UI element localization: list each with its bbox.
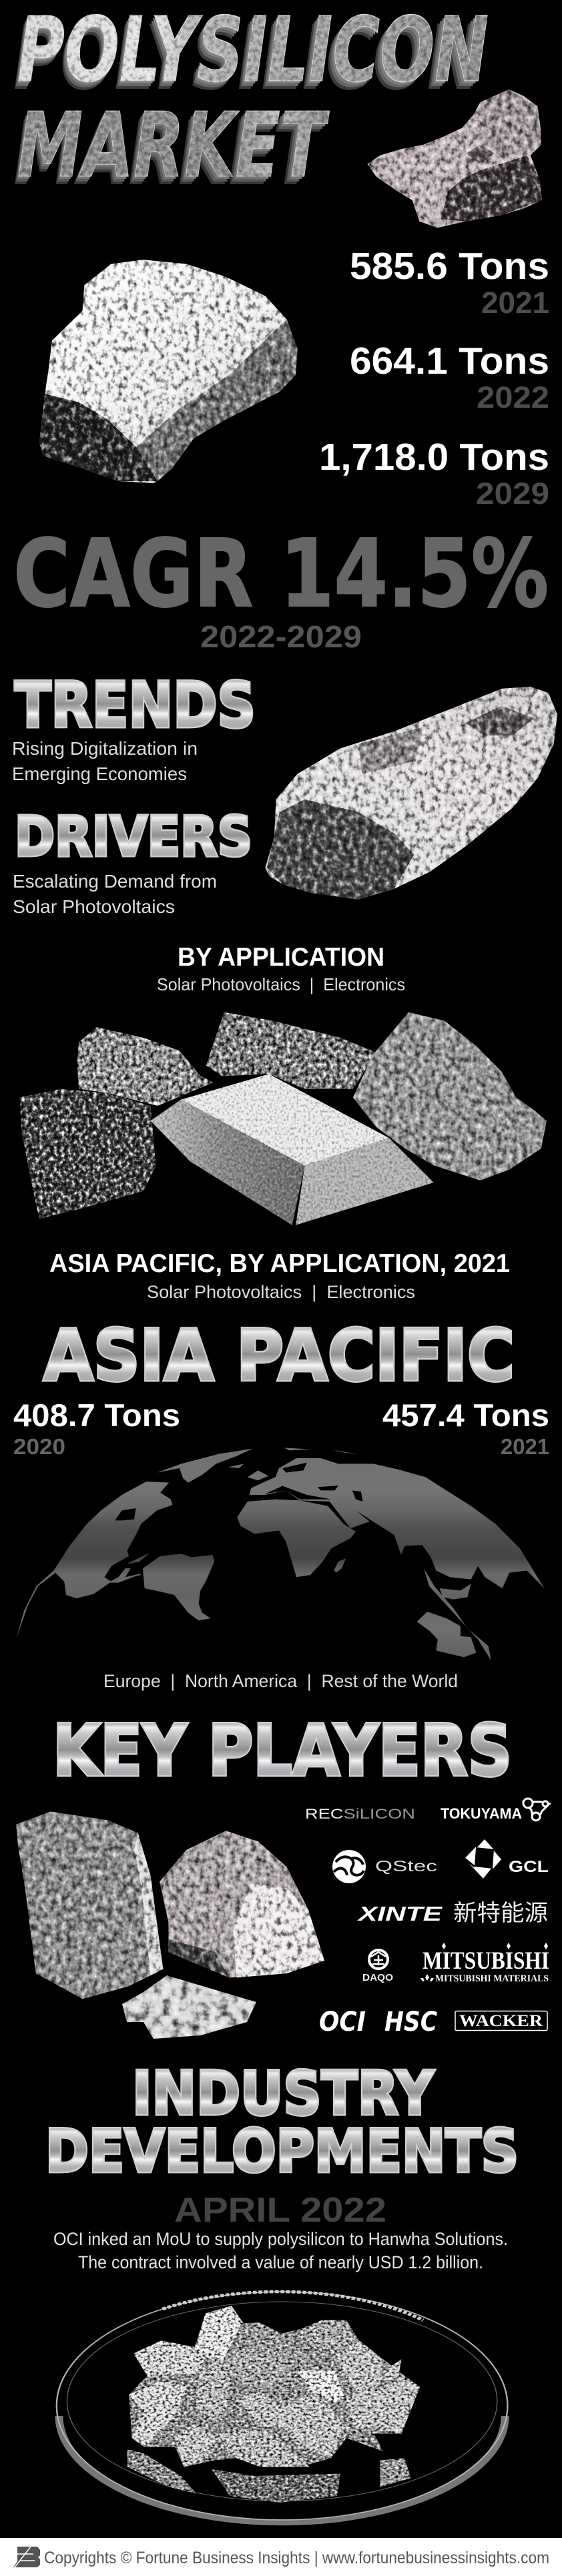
- stat: 2022 volume: [350, 340, 549, 414]
- stat: 2021 volume: 585.6 Tons: [350, 245, 549, 288]
- Hudson Bay: [115, 1508, 136, 1520]
- title line: MARKET: MARKET: [13, 101, 322, 206]
- inland seas: [265, 1463, 362, 1502]
- text: development description: The contract involved a value of nearly USD 1.2 billion.: [78, 2252, 483, 2272]
- stat: Asia Pacific 2020: 408.7 Tons: [13, 1397, 180, 1433]
- stat: 2029 volume: 1,718.0 Tons: [319, 436, 549, 478]
- title line: MARKET: MARKET: [15, 99, 324, 203]
- stat: 2021 volume: [350, 245, 549, 320]
- logo: HSC: HSC: [384, 2007, 437, 2037]
- image: oblong polysilicon rock: [265, 687, 557, 900]
- stat: 2029 volume: [319, 436, 549, 511]
- text: trends description: [12, 738, 198, 784]
- Australia: [417, 1612, 476, 1657]
- logo: Xinte: [356, 1901, 548, 1926]
- footer bar: [0, 2538, 562, 2576]
- heading: Asia Pacific: ASIA PACIFIC: [43, 1315, 515, 1397]
- rock: right: [353, 1012, 547, 1181]
- date: April 2022: APRIL 2022: [174, 2191, 386, 2230]
- Eurasia: [249, 1458, 544, 1588]
- text: Asia Pacific segments: Solar Photovoltaics | Electronics: [147, 1282, 415, 1302]
- logo: Daqo: [362, 1950, 393, 1983]
- stat: Asia Pacific 2020: 2020: [13, 1434, 65, 1459]
- title: [13, 0, 489, 206]
- rock: left dark cube: [20, 1089, 156, 1219]
- silicon chunks: [129, 2306, 420, 2467]
- heading: industry developments: INDUSTRY: [132, 2059, 435, 2129]
- text: drivers description: Escalating Demand from: [13, 871, 217, 892]
- logo: Daqo: DAQO: [362, 1972, 393, 1983]
- logo: Xinte: 新特能源: [453, 1901, 548, 1926]
- South America: [143, 1554, 214, 1620]
- image: large polysilicon rock: [39, 260, 298, 483]
- glass dish rim: [57, 2292, 507, 2523]
- Central America: [108, 1568, 141, 1583]
- stat: Asia Pacific 2021: [382, 1397, 549, 1459]
- Arctic islands: [284, 1447, 359, 1454]
- text: trends description: Rising Digitalization in: [12, 738, 198, 759]
- rock: left: [16, 1812, 163, 1999]
- text: development description: [53, 2229, 508, 2272]
- North America: [17, 1482, 172, 1638]
- text: drivers description: [13, 871, 217, 917]
- stat: 2022 volume: 2022: [477, 380, 549, 414]
- text: application segments: Solar Photovoltaics | Electronics: [157, 974, 405, 994]
- image: small polysilicon rock: [367, 89, 542, 228]
- heading: industry developments: [45, 2059, 519, 2186]
- Greenland: [157, 1449, 253, 1483]
- Southeast Asia: [424, 1568, 491, 1660]
- Iceland: [228, 1464, 244, 1468]
- stat: Asia Pacific 2021: 457.4 Tons: [382, 1397, 549, 1433]
- text: other regions: Europe | North America | Rest of the World: [103, 1671, 458, 1691]
- silicon ingot: [151, 1074, 434, 1225]
- logo: Mitsubishi Materials: [420, 1943, 549, 1984]
- image: glass dish with silicon chunks: [57, 2292, 507, 2523]
- heading: by application: BY APPLICATION: [178, 943, 384, 972]
- British Isles: [248, 1470, 268, 1480]
- text: drivers description: Solar Photovoltaics: [13, 896, 175, 917]
- stat: Asia Pacific 2020: [13, 1397, 180, 1459]
- text: trends description: Emerging Economies: [12, 763, 187, 784]
- heading: trends: TRENDS: [15, 669, 256, 742]
- heading: drivers: DRIVERS: [15, 806, 252, 869]
- heading: Asia Pacific by application: ASIA PACIFIC, BY APPLICATION, 2021: [49, 1249, 510, 1278]
- title line: MARKET: MARKET: [16, 96, 327, 200]
- rock: bottom: [122, 1975, 256, 2039]
- stat: 2021 volume: 2021: [481, 286, 549, 320]
- stat: 2022 volume: 664.1 Tons: [350, 340, 549, 382]
- reflection of chunks: [127, 2449, 410, 2503]
- image: key players rocks: [16, 1812, 324, 2039]
- logo: REC Silicon: REC SiLICON: [305, 1807, 415, 1822]
- logo: Tokuyama: TOKUYAMA: [441, 1805, 522, 1822]
- CAGR period: 2022-2029: [200, 619, 362, 654]
- logo: QStec: [332, 1850, 437, 1883]
- logo: GCL: GCL: [509, 1858, 549, 1876]
- logo: Fortune Business Insights: [13, 2547, 40, 2567]
- image: group of silicon chunks and ingot: [20, 1012, 547, 1225]
- image: world map globe: [17, 1447, 544, 1660]
- logo: Tokuyama: [441, 1799, 549, 1822]
- logo: Xinte: XINTE: [356, 1902, 443, 1925]
- stat: 2029 volume: 2029: [476, 476, 549, 511]
- title line: MARKET: MARKET: [17, 93, 330, 198]
- rock: back left: [77, 1027, 214, 1106]
- logo: Wacker: WACKER: [459, 2012, 543, 2030]
- text: development description: OCI inked an MoU to supply polysilicon to Hanwha Solutions.: [53, 2229, 508, 2249]
- logo: QStec: QStec: [375, 1857, 437, 1875]
- logo: Mitsubishi Materials: MITSUBISHI MATERIALS: [435, 1973, 549, 1984]
- Madagascar: [334, 1558, 346, 1572]
- logo: GCL: [465, 1839, 549, 1879]
- stat: Asia Pacific 2021: 2021: [501, 1434, 549, 1459]
- rock: back middle: [206, 1012, 376, 1089]
- logo: OCI: OCI: [319, 2007, 366, 2037]
- Caribbean: [127, 1553, 150, 1564]
- rock: middle: [160, 1831, 324, 1977]
- Africa: [237, 1500, 356, 1577]
